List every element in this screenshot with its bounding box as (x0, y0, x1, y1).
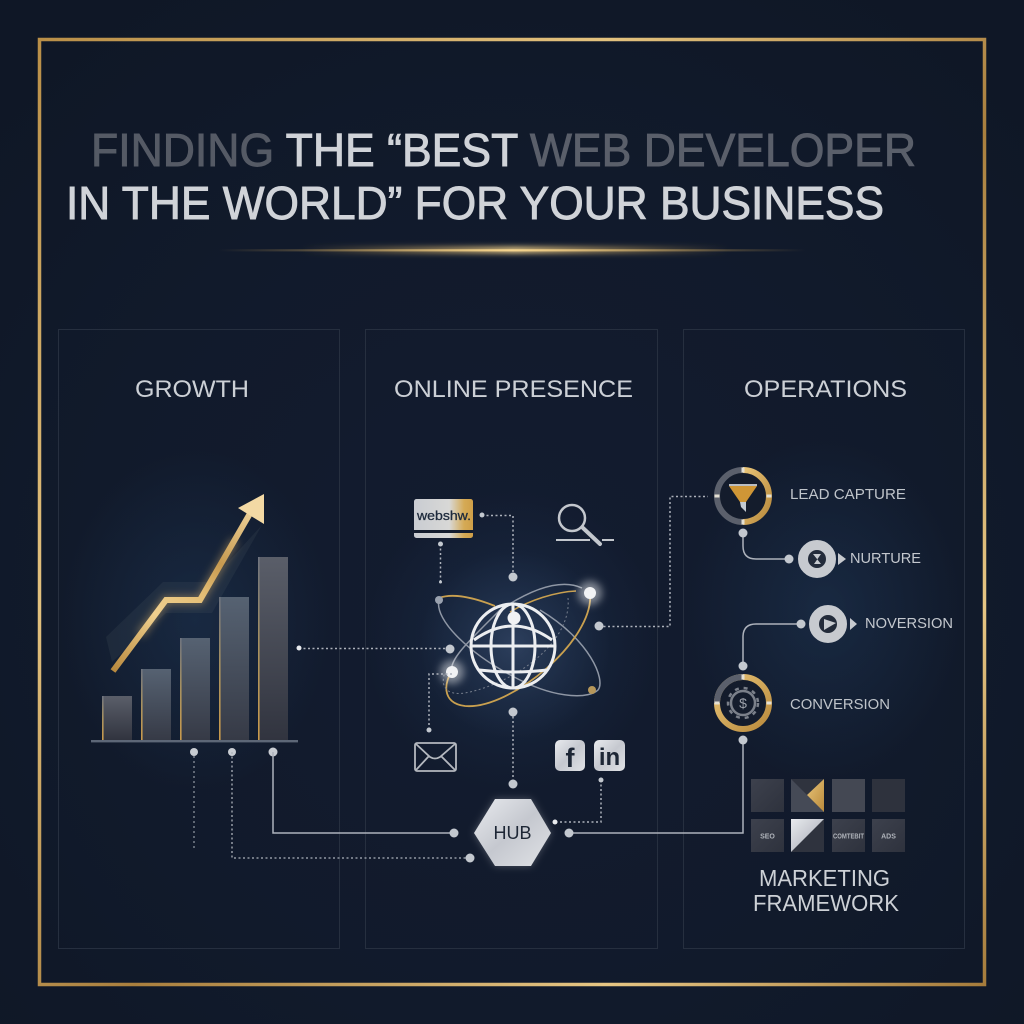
bar chart (91, 557, 298, 742)
panel: operations (684, 330, 964, 948)
heading: growth: GROWTH (135, 376, 249, 403)
globe to hub connector (512, 712, 514, 784)
hub to conversion connector (569, 741, 743, 833)
chart to hub solid connector (273, 752, 454, 833)
funnel ring icon (714, 468, 772, 524)
label: lead capture: LEAD CAPTURE (790, 486, 906, 503)
tile with silver triangle (791, 819, 824, 852)
heading: online presence: ONLINE PRESENCE (394, 376, 633, 403)
title line 2: IN THE WORLD” FOR YOUR BUSINESS (66, 177, 884, 229)
label: noversion: NOVERSION (865, 615, 953, 632)
label: nurture: NURTURE (850, 550, 921, 567)
card to globe top connector (482, 516, 513, 577)
envelope icon (415, 743, 456, 771)
heading: operations: OPERATIONS (744, 376, 907, 403)
heading: marketing framework: FRAMEWORK (753, 890, 900, 916)
gold title rule (218, 247, 806, 253)
label: conversion: CONVERSION (790, 696, 890, 713)
gear ring icon: $ (739, 695, 747, 711)
chart to hub dotted connector (232, 752, 470, 858)
funnel to nurture connector (743, 533, 789, 559)
search icon (556, 505, 614, 544)
hub hexagon: HUB (493, 823, 532, 843)
marketing tile grid (751, 779, 905, 852)
marketing tile grid: ADS (881, 834, 896, 840)
social to hub connector (555, 780, 601, 822)
marketing tile grid: COMTEBIT (833, 834, 865, 840)
panel: online presence (366, 330, 658, 948)
lead capture step (714, 468, 906, 524)
globe with orbits (420, 550, 610, 740)
tile with gold triangle (791, 779, 824, 812)
orbit nodes (435, 581, 602, 694)
gear ring icon (714, 674, 772, 731)
card down connector (440, 544, 442, 582)
globe to envelope connector (429, 674, 452, 730)
website card icon: webshw. (416, 508, 471, 523)
icon: facebook: f (566, 743, 576, 773)
noversion step (814, 610, 953, 638)
chart to globe connector (299, 648, 450, 650)
heading: marketing framework (753, 865, 900, 916)
icon: linkedin: in (599, 744, 620, 771)
title (66, 124, 916, 229)
panel: growth (58, 330, 340, 948)
connector dots under chart (190, 748, 278, 850)
connector lines (232, 496, 801, 858)
heading: marketing framework: MARKETING (759, 865, 890, 891)
hub hexagon (474, 799, 551, 866)
noversion to conversion connector (743, 624, 801, 666)
social icons (555, 740, 625, 773)
conversion step (714, 674, 890, 731)
globe icon (471, 604, 555, 688)
growth arrow (106, 494, 264, 671)
title line 1: FINDING THE “BEST WEB DEVELOPER (91, 124, 916, 176)
nurture step (803, 545, 921, 573)
globe to funnel connector (599, 496, 708, 626)
connector nodes (296, 512, 806, 862)
orbit lines (439, 584, 600, 706)
website card icon (414, 499, 473, 538)
marketing tile grid: SEO (760, 834, 775, 840)
